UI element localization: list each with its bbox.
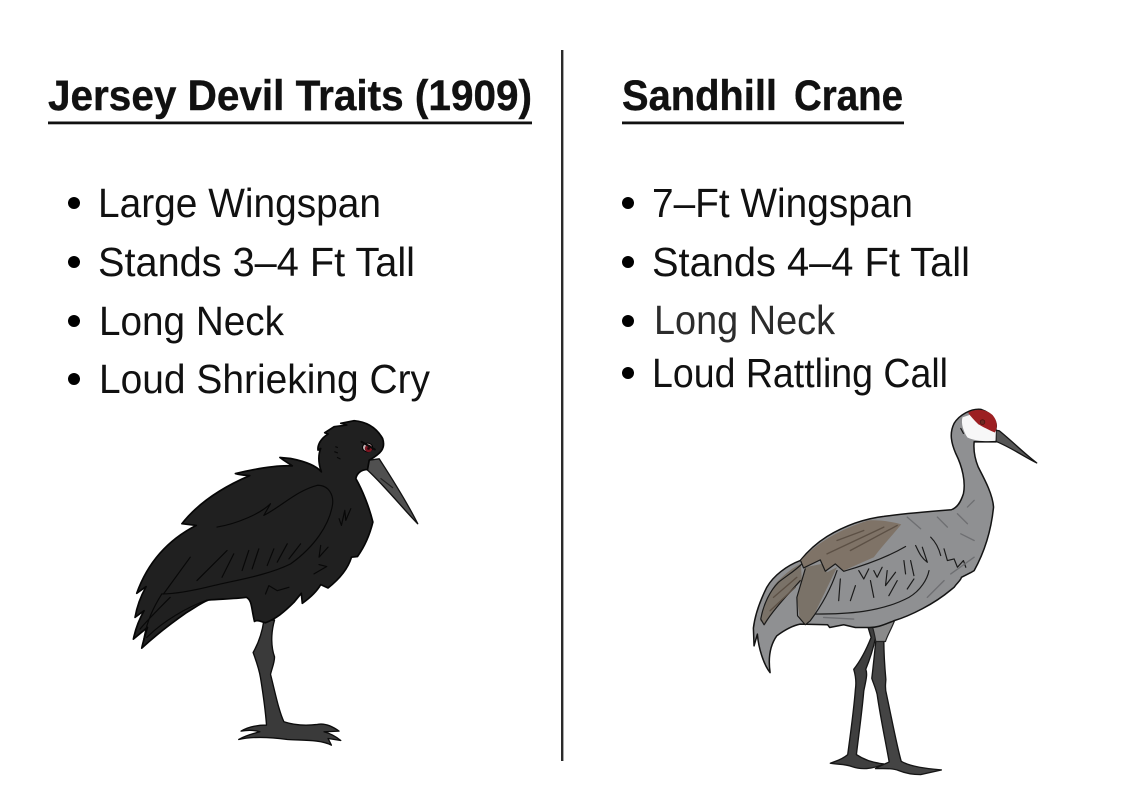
panel: Sandhill Crane xyxy=(622,72,1037,775)
black bird beak xyxy=(367,459,418,524)
list: Jersey Devil traits: Stands 3–4 Ft Tall xyxy=(98,239,415,285)
illustration: sandhill crane xyxy=(753,409,1037,775)
crane red crown xyxy=(968,410,997,432)
crane body xyxy=(753,409,996,673)
list: Sandhill Crane traits xyxy=(622,180,970,396)
heading: Sandhill Crane: Sandhill xyxy=(622,72,777,120)
list: Jersey Devil traits xyxy=(68,180,430,402)
black bird eye xyxy=(362,442,375,452)
list: Sandhill Crane traits: Long Neck xyxy=(654,297,835,343)
list: Sandhill Crane traits: Loud Rattling Call xyxy=(652,350,948,396)
black bird body xyxy=(133,421,384,648)
crane front leg xyxy=(872,641,941,775)
list: Jersey Devil traits: Loud Shrieking Cry xyxy=(99,356,430,402)
crane brown wing patch xyxy=(801,520,901,571)
black bird wing lines xyxy=(140,447,393,641)
crane plumage texture xyxy=(770,500,974,619)
crane white face xyxy=(962,413,996,441)
center divider xyxy=(561,50,563,761)
heading: Sandhill Crane: Crane xyxy=(794,72,903,120)
panel: Jersey Devil xyxy=(48,72,532,745)
black bird leg and foot xyxy=(239,620,341,745)
heading: Jersey Devil Traits: Jersey Devil Traits (1909) xyxy=(48,72,532,120)
list: Sandhill Crane traits: 7–Ft Wingspan xyxy=(652,180,913,226)
list: Sandhill Crane traits: Stands 4–4 Ft Tall xyxy=(652,239,970,285)
illustration: black bird xyxy=(133,421,418,745)
crane brown feathers xyxy=(760,564,837,625)
heading: Sandhill Crane xyxy=(622,72,904,124)
list: Jersey Devil traits: Long Neck xyxy=(99,298,284,344)
crane back leg xyxy=(830,624,884,769)
crane eye xyxy=(980,420,985,424)
crane wing lines xyxy=(761,428,966,625)
crane beak xyxy=(994,430,1037,463)
list: Jersey Devil traits: Large Wingspan xyxy=(98,180,381,226)
crane thigh xyxy=(872,621,895,642)
